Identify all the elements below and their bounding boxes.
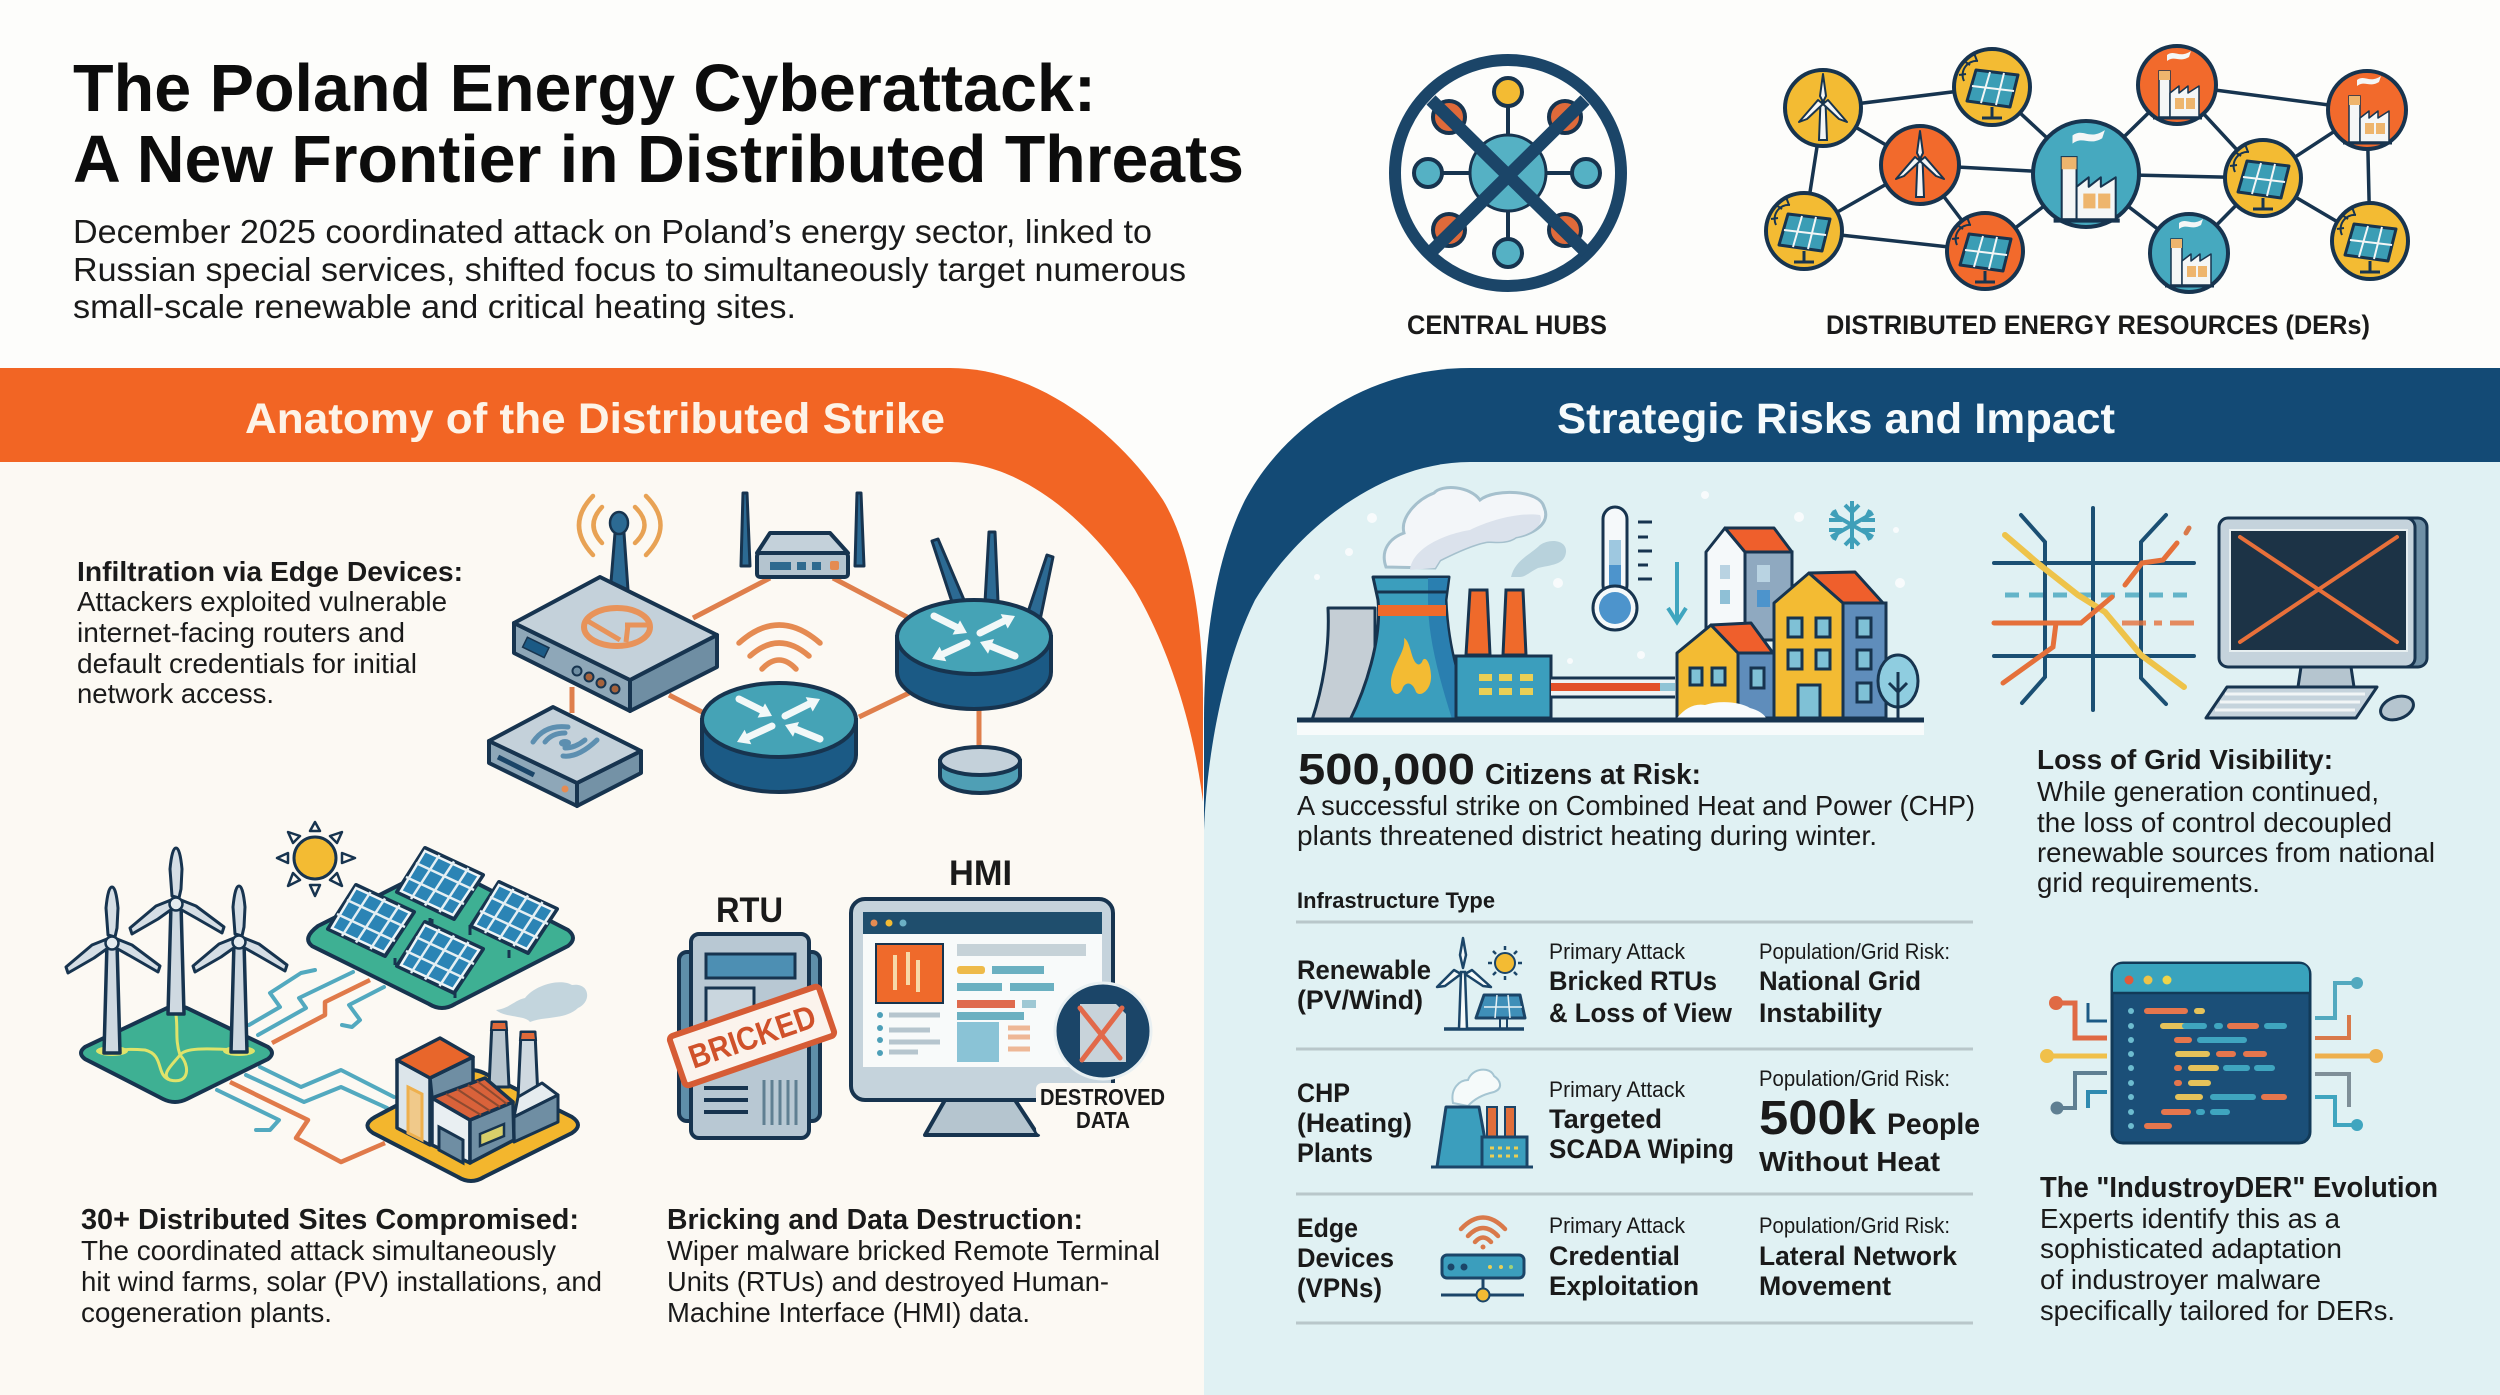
text block: IndustroyDER evolution: specifically tailored for DERs.: [2040, 1295, 2395, 1326]
text block: infiltration via edge devices: internet-facing routers and: [77, 617, 405, 648]
text block: bricking and data destruction: Units (RTUs) and destroyed Human-: [667, 1266, 1109, 1297]
text block: bricking and data destruction: Machine Interface (HMI) data.: [667, 1297, 1030, 1328]
row: renewable: [1297, 938, 1950, 1029]
icon: malware code window with circuits: [2040, 963, 2383, 1143]
label: destroyed data: [1036, 1083, 1169, 1135]
text block: loss of grid visibility: While generation continued,: [2037, 776, 2379, 807]
text block: IndustroyDER evolution: of industroyer malware: [2040, 1264, 2321, 1295]
panel: right navy section banner: [1204, 368, 2500, 840]
row: CHP: SCADA Wiping: [1549, 1134, 1734, 1164]
text block: distributed sites compromised: The coordinated attack simultaneously: [81, 1235, 556, 1266]
illustration: wind farm, solar field and plant linked by cables: [66, 822, 587, 1181]
subtitle text block: December 2025 coordinated attack on Poland’s energy sector, linked to: [73, 213, 1152, 250]
icon: central hub crossed out: [1395, 60, 1621, 286]
row: edge devices: Movement: [1759, 1271, 1891, 1301]
text block: infiltration via edge devices: default credentials for initial: [77, 648, 417, 679]
table heading: Infrastructure Type: [1297, 888, 1495, 913]
heading: anatomy of the distributed strike: Anatomy of the Distributed Strike: [245, 395, 945, 443]
row: renewable: Bricked RTUs: [1549, 966, 1717, 996]
subtitle text block: [73, 213, 1186, 325]
text block: citizens at risk: [1297, 745, 1975, 851]
row: renewable: Instability: [1759, 998, 1882, 1028]
subtitle text block: small-scale renewable and critical heating sites.: [73, 288, 796, 325]
label: destroyed data: DESTROVED: [1040, 1084, 1165, 1110]
text block: bricking and data destruction: [667, 1204, 1160, 1328]
icon: bricked RTU device: [669, 934, 835, 1138]
row: CHP: CHP: [1297, 1078, 1350, 1108]
row: CHP: (Heating): [1297, 1108, 1412, 1138]
text block: IndustroyDER evolution: Experts identify this as a: [2040, 1203, 2340, 1234]
panel: left orange section banner: [0, 368, 1203, 830]
icon: bricked RTU device: BRICKED: [684, 997, 821, 1075]
row: renewable: (PV/Wind): [1297, 985, 1423, 1015]
text block: IndustroyDER evolution: The "IndustroyDER" Evolution: [2040, 1172, 2438, 1204]
row: edge devices: Population/Grid Risk:: [1759, 1213, 1950, 1238]
text block: citizens at risk: 500,000: [1298, 745, 1475, 794]
text block: distributed sites compromised: 30+ Distributed Sites Compromised:: [81, 1204, 579, 1236]
row: renewable: National Grid: [1759, 966, 1921, 996]
row: renewable: Renewable: [1297, 955, 1431, 985]
icon: dead monitor with keyboard: [2206, 518, 2427, 724]
icon: distributed energy resources network: [1766, 46, 2408, 292]
title: The Poland Energy Cyberattack:: [73, 51, 1096, 126]
row: edge devices: [1297, 1213, 1958, 1303]
title: [73, 51, 1244, 197]
text block: bricking and data destruction: Bricking and Data Destruction:: [667, 1204, 1083, 1236]
row: renewable: Population/Grid Risk:: [1759, 939, 1950, 964]
text block: distributed sites compromised: cogeneration plants.: [81, 1297, 332, 1328]
text block: citizens at risk: plants threatened district heating during winter.: [1297, 820, 1877, 851]
label: RTU: RTU: [716, 891, 783, 930]
text block: IndustroyDER evolution: [2040, 1172, 2438, 1326]
panel: left cream content area: [0, 462, 1204, 1395]
row: CHP: [1297, 1066, 1980, 1177]
row: renewable: & Loss of View: [1549, 998, 1733, 1028]
label: HMI: HMI: [949, 854, 1012, 893]
title: A New Frontier in Distributed Threats: [73, 122, 1244, 197]
row: CHP: People: [1887, 1108, 1980, 1141]
text block: loss of grid visibility: renewable sources from national: [2037, 837, 2435, 868]
row: edge devices: Devices: [1297, 1243, 1394, 1273]
text block: loss of grid visibility: Loss of Grid Visibility:: [2037, 744, 2333, 775]
text block: distributed sites compromised: [81, 1204, 602, 1328]
label: distributed energy resources: DISTRIBUTED ENERGY RESOURCES (DERs): [1826, 310, 2370, 340]
text block: infiltration via edge devices: Attackers exploited vulnerable: [77, 586, 447, 617]
text block: loss of grid visibility: [2037, 744, 2435, 898]
subtitle text block: Russian special services, shifted focus to simultaneously target numerous: [73, 251, 1186, 288]
label: central hubs: CENTRAL HUBS: [1407, 310, 1607, 340]
row: edge devices: Lateral Network: [1759, 1241, 1958, 1271]
row: CHP: Plants: [1297, 1138, 1373, 1168]
text block: distributed sites compromised: hit wind farms, solar (PV) installations, and: [81, 1266, 602, 1297]
row: CHP: Targeted: [1549, 1104, 1662, 1134]
text block: citizens at risk: Citizens at Risk:: [1485, 759, 1701, 791]
row: edge devices: (VPNs): [1297, 1273, 1382, 1303]
row: edge devices: Credential: [1549, 1241, 1680, 1271]
row: edge devices: Exploitation: [1549, 1271, 1699, 1301]
illustration: CHP plant and winter city: [1297, 488, 1924, 735]
row: renewable: Primary Attack: [1549, 939, 1686, 964]
row: CHP: Population/Grid Risk:: [1759, 1066, 1950, 1091]
row: CHP: Primary Attack: [1549, 1077, 1686, 1102]
illustration: network of edge routers: [489, 493, 1053, 806]
text block: bricking and data destruction: Wiper malware bricked Remote Terminal: [667, 1235, 1160, 1266]
text block: loss of grid visibility: the loss of control decoupled: [2037, 807, 2392, 838]
text block: citizens at risk: A successful strike on Combined Heat and Power (CHP): [1297, 790, 1975, 821]
text block: IndustroyDER evolution: sophisticated adaptation: [2040, 1233, 2342, 1264]
text block: loss of grid visibility: grid requirements.: [2037, 867, 2260, 898]
label: destroyed data: DATA: [1076, 1107, 1130, 1133]
text block: infiltration via edge devices: network access.: [77, 678, 274, 709]
panel: right pale blue content area: [1204, 462, 2500, 1395]
row: CHP: 500k: [1759, 1092, 1876, 1145]
text block: infiltration via edge devices: [77, 556, 463, 709]
icon: HMI monitor with destroyed data: [851, 899, 1151, 1135]
row: edge devices: Edge: [1297, 1213, 1358, 1243]
table: infrastructure risk: [1296, 888, 1980, 1323]
heading: strategic risks and impact: Strategic Risks and Impact: [1557, 395, 2115, 443]
text block: infiltration via edge devices: Infiltration via Edge Devices:: [77, 556, 463, 587]
row: CHP: Without Heat: [1759, 1146, 1940, 1177]
row: edge devices: Primary Attack: [1549, 1213, 1686, 1238]
icon: disrupted grid map: [1994, 508, 2201, 710]
